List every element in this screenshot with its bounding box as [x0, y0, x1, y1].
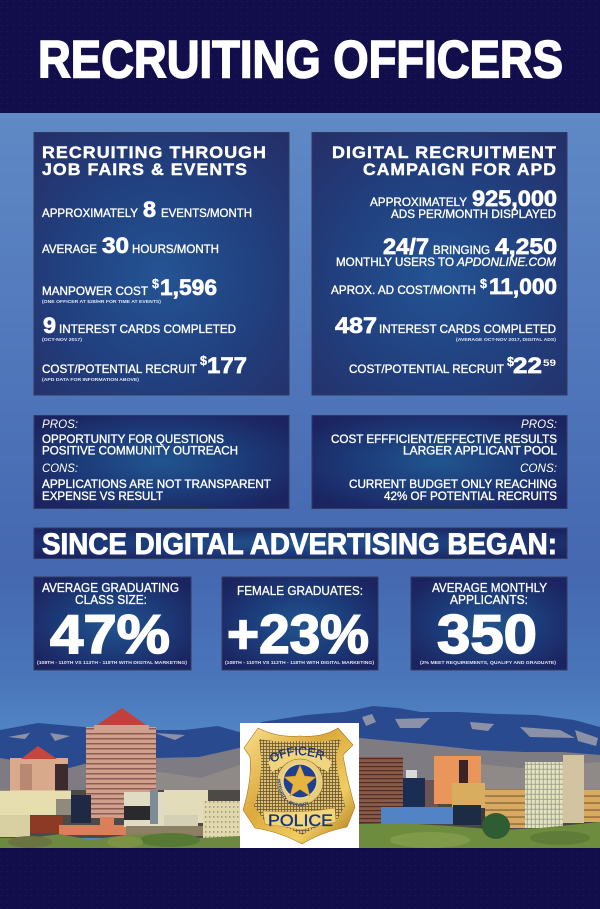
stat: events per month: 8	[143, 197, 156, 222]
stat: interest cards	[42, 313, 236, 342]
stat: ad cost	[331, 274, 557, 299]
panel: digital pros and cons: COST EFFFICIENT/EFFECTIVE RESULTS	[331, 432, 557, 446]
heading: digital campaign: CAMPAIGN FOR APD	[363, 160, 557, 179]
heading: job fairs	[42, 143, 267, 179]
stat: digital interest cards: 487	[335, 313, 377, 338]
heading: job fairs: JOB FAIRS & EVENTS	[42, 160, 248, 179]
stat: manpower cost: 1,596	[160, 275, 217, 300]
stat: cost per recruit	[42, 353, 247, 382]
panel: digital pros and cons: PROS:	[521, 417, 557, 431]
stat card: monthly applicants: 350	[437, 603, 537, 665]
stat: ads per month	[370, 186, 557, 221]
left foreground buildings	[0, 708, 240, 838]
panel: digital pros and cons: LARGER APPLICANT POOL	[403, 444, 557, 458]
stat: cost per recruit: $	[200, 353, 208, 368]
stat: monthly users: MONTHLY USERS TO	[336, 255, 454, 269]
panel: digital recruitment	[312, 132, 567, 395]
stat: ad cost: APROX. AD COST/MONTH	[331, 283, 476, 297]
stat: interest cards: 9	[43, 313, 56, 338]
stat: cost per recruit: 177	[207, 353, 247, 378]
star seal: INTEGRITY • BRAVERY	[277, 779, 308, 806]
panel: digital pros and cons: 42% OF POTENTIAL RECRUITS	[384, 489, 557, 503]
stat: digital cost per recruit	[349, 353, 556, 378]
stat: digital interest cards: INTEREST CARDS COMPLETED	[379, 322, 556, 336]
heading: job fairs: RECRUITING THROUGH	[42, 143, 267, 162]
stat card: female graduates: (108TH - 110TH VS 113TH - 118TH WITH DIGITAL MARKETING)	[225, 660, 375, 665]
stat: cost per recruit: COST/POTENTIAL RECRUIT	[42, 362, 198, 376]
right foreground buildings	[359, 755, 600, 828]
panel: job fair pros and cons	[34, 416, 289, 508]
stat: manpower cost: (ONE OFFICER AT $28/HR FOR TIME AT EVENTS)	[42, 299, 162, 304]
stat card: monthly applicants	[411, 577, 567, 670]
stat: manpower cost: MANPOWER COST	[42, 284, 149, 298]
stat: monthly users: 4,250	[495, 234, 557, 259]
left greenery	[0, 833, 240, 848]
panel: digital pros and cons: CONS:	[520, 461, 557, 475]
panel: job fair pros and cons: EXPENSE VS RESULT	[42, 489, 164, 503]
stat: events per month: EVENTS/MONTH	[161, 206, 252, 220]
stat card: class size	[34, 577, 191, 670]
heading: digital campaign	[332, 143, 557, 179]
stat: ads per month: 925,000	[472, 186, 557, 211]
panel: job fair pros and cons: APPLICATIONS ARE NOT TRANSPARENT	[42, 477, 272, 491]
stat: events per month	[42, 197, 252, 222]
stat card: female graduates	[222, 577, 378, 670]
icon: police badge	[240, 723, 359, 848]
police banner: POLICE	[268, 811, 333, 830]
panel: job fair pros and cons: POSITIVE COMMUNITY OUTREACH	[42, 444, 238, 458]
footer band	[0, 848, 600, 909]
section heading strip: SINCE DIGITAL ADVERTISING BEGAN:	[42, 528, 557, 561]
panel: job fair pros and cons: OPPORTUNITY FOR QUESTIONS	[42, 432, 224, 446]
panel: digital pros and cons: CURRENT BUDGET ONLY REACHING	[349, 477, 557, 491]
mountains	[0, 706, 600, 838]
panel: digital pros and cons	[312, 416, 567, 508]
stat: monthly users: BRINGING	[433, 243, 490, 257]
stat: interest cards: (OCT-NOV 2017)	[42, 337, 83, 342]
stat card: monthly applicants: APPLICANTS:	[450, 593, 528, 607]
stat: digital interest cards: (AVERAGE OCT-NOV 2017, DIGITAL ADS)	[456, 337, 557, 342]
stat: hours per month: AVERAGE	[42, 242, 97, 256]
stat: monthly users: 24/7	[383, 234, 429, 259]
stat: monthly users	[336, 234, 557, 269]
stat card: female graduates: +23%	[227, 603, 369, 665]
stat card: monthly applicants: AVERAGE MONTHLY	[432, 581, 548, 595]
stat: digital cost per recruit: 59	[543, 358, 556, 368]
stat: digital interest cards	[335, 313, 557, 342]
stat: ads per month: ADS PER/MONTH DISPLAYED	[391, 207, 556, 221]
officer ribbon text: TRUST	[285, 763, 306, 773]
stat: ad cost: 11,000	[489, 274, 557, 299]
heading: digital campaign: DIGITAL RECRUITMENT	[332, 143, 557, 162]
badge shield	[243, 728, 355, 844]
skyline photo illustration	[0, 706, 600, 848]
stat card: class size: CLASS SIZE:	[75, 593, 147, 607]
stat: cost per recruit: (APD DATA FOR INFORMATION ABOVE)	[42, 377, 140, 382]
right greenery	[359, 822, 600, 848]
stat card: class size: (108TH - 110TH VS 113TH - 118TH WITH DIGITAL MARKETING)	[37, 660, 188, 665]
stat: ad cost: $	[480, 276, 488, 291]
stat card: class size: AVERAGE GRADUATING	[42, 581, 179, 595]
stat card: female graduates: FEMALE GRADUATES:	[237, 584, 363, 598]
stat: monthly users: APDONLINE.COM	[456, 255, 556, 269]
stat: digital cost per recruit: COST/POTENTIAL RECRUIT	[349, 362, 505, 376]
stat: hours per month: 30	[102, 233, 129, 258]
stat: hours per month	[42, 233, 219, 258]
stat: ads per month: APPROXIMATELY	[370, 195, 467, 209]
panel: job fair pros and cons: PROS:	[42, 417, 78, 431]
stat: interest cards: INTEREST CARDS COMPLETED	[59, 322, 236, 336]
stat card: monthly applicants: (2% MEET REQUIREMENTS, QUALIFY AND GRADUATE)	[420, 660, 557, 665]
officer ribbon text: OFFICER	[270, 746, 324, 762]
panel: job fair pros and cons: CONS:	[42, 461, 78, 475]
stat: manpower cost	[42, 275, 217, 304]
stat: digital cost per recruit: $	[507, 354, 515, 369]
stat: hours per month: HOURS/MONTH	[132, 242, 219, 256]
officer ribbon text	[268, 746, 332, 772]
stat: digital cost per recruit: 22	[513, 353, 542, 378]
panel: job fairs and events	[34, 132, 289, 395]
stat card: class size: 47%	[50, 603, 170, 665]
tree	[482, 813, 510, 839]
stat: manpower cost: $	[152, 276, 160, 291]
header band	[0, 0, 600, 113]
stat: events per month: APPROXIMATELY	[42, 206, 138, 220]
